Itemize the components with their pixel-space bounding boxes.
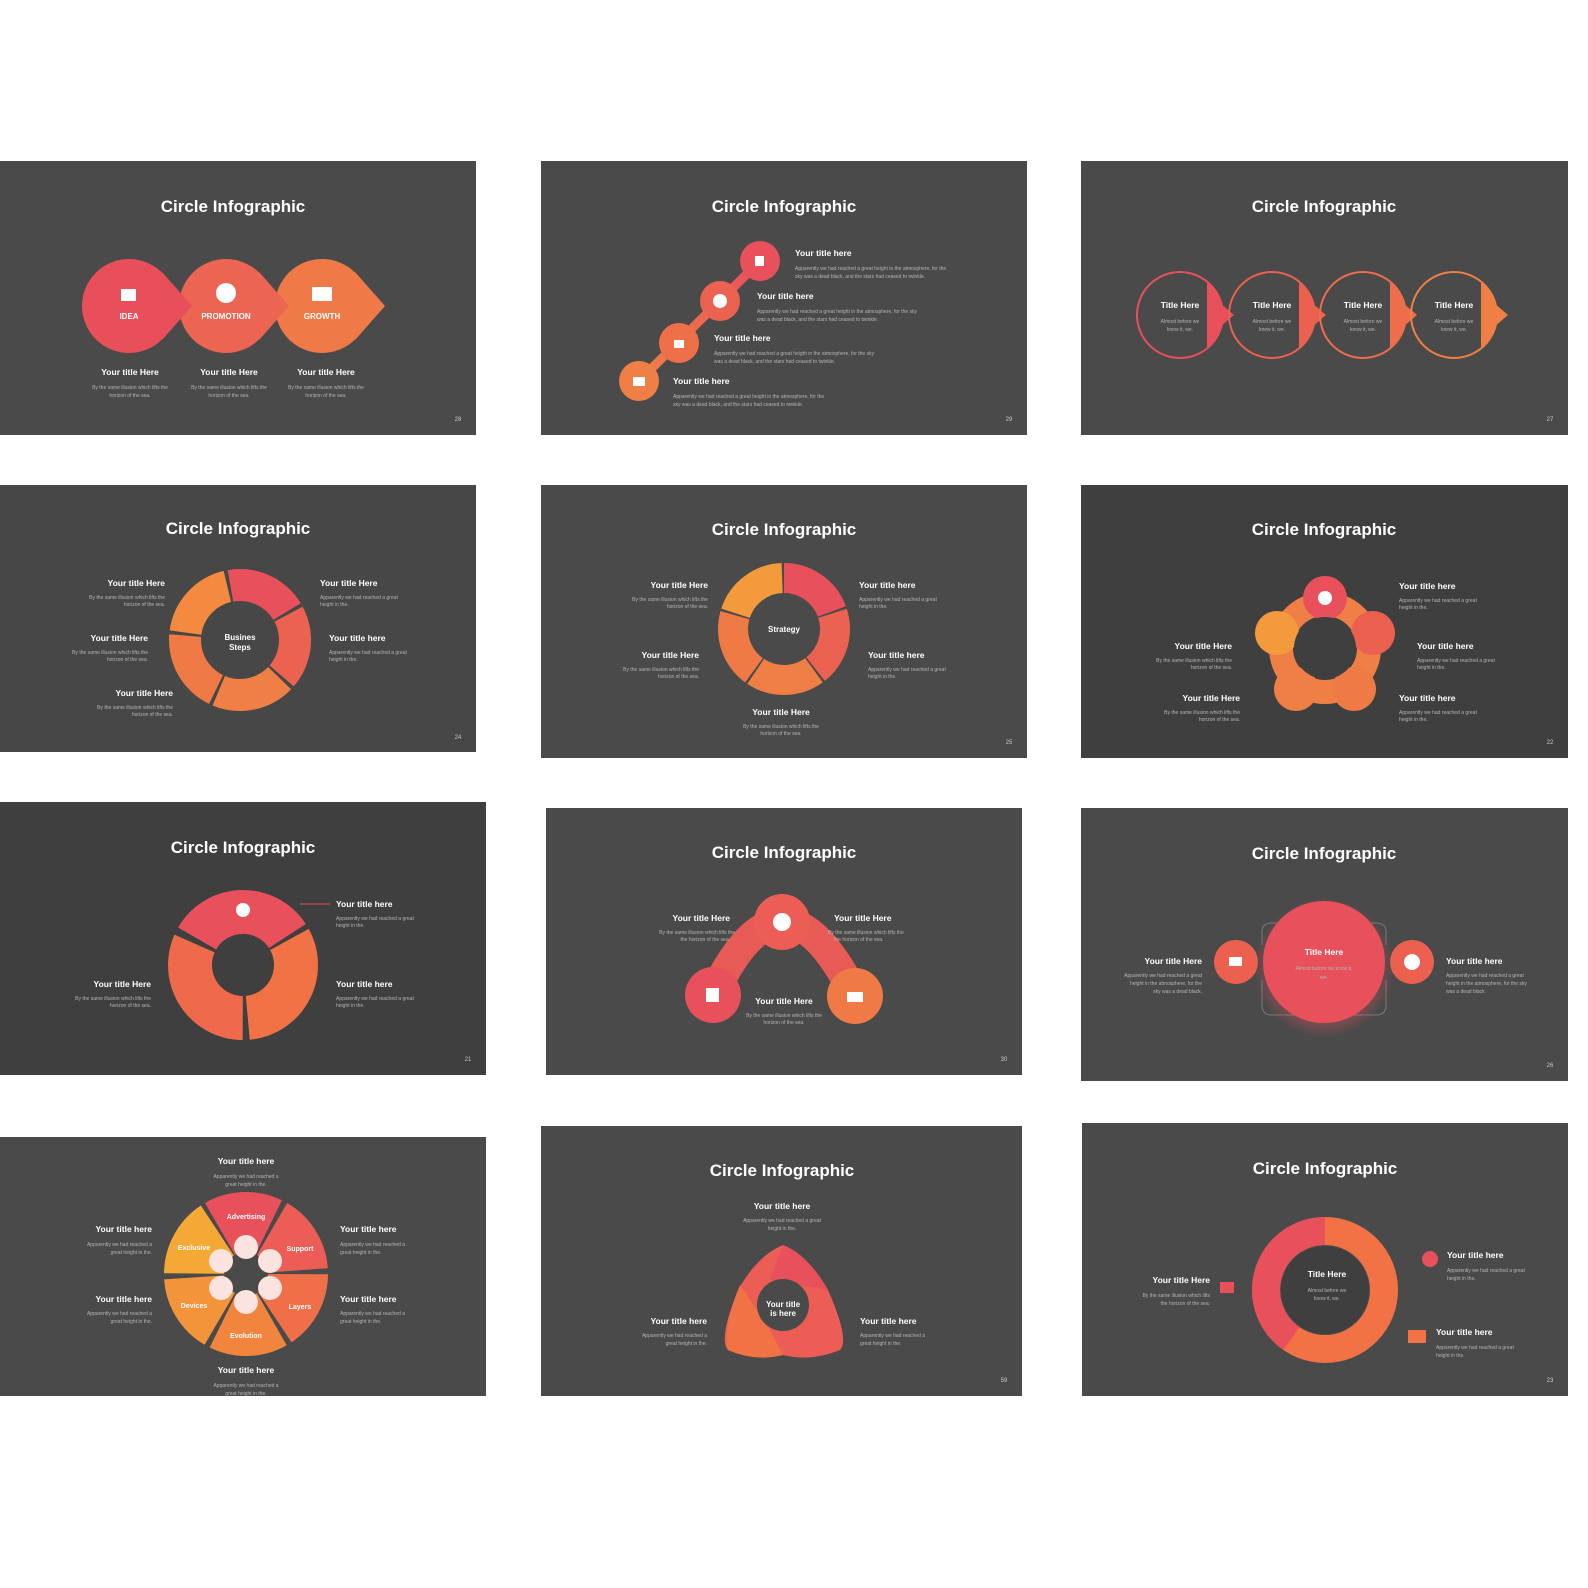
text blocks: By the same illusion which lifts the [1156,658,1232,664]
text blocks: Apparently we had reached a great [1399,710,1477,716]
ring chart [171,893,315,1037]
text blocks: Apparently we had reached a great height in the atmosphere, for the sky [714,351,875,357]
circle: promotion: PROMOTION [201,312,251,321]
text blocks: great height in the. [340,1319,381,1325]
triangle ring: Your title [766,1300,801,1309]
text blocks: By the same illusion which lifts the [72,650,148,656]
circle: growth [275,259,385,353]
title: Circle Infographic [712,843,856,862]
text blocks: Apparently we had reached a [642,1333,707,1339]
text blocks: Your title Here [1175,641,1232,651]
circle: idea [82,259,192,353]
text blocks: Your title here [795,248,852,258]
text blocks: Your title here [1417,641,1474,651]
triangle ring: is here [770,1309,796,1318]
text blocks: Your title Here [320,578,378,588]
text blocks: was a dead black. [1446,989,1486,995]
text blocks: Your title here [754,1201,811,1211]
slide 1: three circles [0,161,476,435]
text blocks: Your title here [336,899,393,909]
text blocks: Apparently we had reached a great [1436,1345,1514,1351]
text blocks: Apparently we had reached a [860,1333,925,1339]
main circle: Almost before we know it, [1296,966,1352,972]
text blocks [75,899,414,1009]
text blocks: Your title here [218,1156,275,1166]
text blocks: By the same illusion which lifts the [743,724,819,730]
title: Circle Infographic [161,197,305,216]
text blocks: Your title here [95,1294,152,1304]
text blocks: the horizon of the sea. [1161,1301,1210,1307]
center text: Almost before we [1308,1288,1347,1294]
diagonal chain [619,241,780,401]
text blocks [1142,1250,1525,1359]
text blocks: Apparently we had reached a great [1124,973,1203,979]
text blocks: sky was a dead black. [1153,989,1202,995]
text blocks: height in the. [336,1003,365,1009]
text blocks: horizon of the sea. [667,604,708,610]
text blocks: Your title Here [108,578,165,588]
circle row: Title Here [1253,300,1292,310]
arch shape [685,894,883,1024]
text blocks: height in the. [1417,665,1446,671]
text blocks: horizon of the sea. [305,393,347,399]
text blocks: By the same illusion which lifts the [92,385,168,391]
text blocks: the horizon of the sea. [681,937,730,943]
text blocks: horizon of the sea. [658,674,699,680]
slide 5: puzzle strategy ring: 25 [1006,740,1013,746]
text blocks: horizon of the sea. [208,393,250,399]
text blocks: Your title Here [752,707,810,717]
title: Circle Infographic [1252,197,1396,216]
slide 7: three-segment ring: 21 [465,1057,472,1063]
circle row: knew it, we. [1167,327,1193,333]
text blocks: the horizon of the sea. [834,937,883,943]
slide 12: two-part ring [1082,1123,1568,1396]
segment labels: Support [287,1246,314,1253]
icon: clock [236,903,250,917]
text blocks: Apparently we had reached a [213,1174,279,1180]
center label: Strategy [768,625,801,634]
text blocks: height in the. [1399,605,1428,611]
text blocks: Your title Here [1145,956,1202,966]
ring chart [1266,1231,1384,1349]
text blocks: Your title Here [94,979,151,989]
slide 1: three circles: 28 [455,417,462,423]
text blocks: Apparently we had reached a great [1446,973,1524,979]
circle row: Almost before we [1253,319,1292,325]
text blocks: height in the. [1447,1276,1476,1282]
slide 8: arch of three circles [546,808,1022,1075]
text blocks: height in the. [868,674,897,680]
text blocks: By the same illusion which lifts the [97,705,173,711]
text blocks: horizon of the sea. [760,731,802,737]
slide 9: central circle: 26 [1547,1063,1554,1069]
segment labels: Layers [289,1304,311,1311]
text blocks: sky was a dead black, and the stars had ceased to twinkle. [795,274,925,280]
text blocks: By the same illusion which lifts the [746,1013,822,1019]
text blocks: great height in the. [340,1250,381,1256]
text blocks: great height in the. [225,1182,267,1188]
text blocks: great height in the. [225,1391,267,1397]
text blocks: Your title here [1399,581,1456,591]
text blocks: Your title here [1446,956,1503,966]
text blocks: Your title here [1447,1250,1504,1260]
center text: Title Here [1308,1269,1347,1279]
text blocks: Your title here [340,1224,397,1234]
circle row: Almost before we [1344,319,1383,325]
circle row [1137,272,1508,358]
text blocks: Your title Here [1153,1275,1210,1285]
circle row: Title Here [1435,300,1474,310]
slide 11: triangular ring [541,1126,1022,1396]
text blocks: Your title here [860,1316,917,1326]
text blocks: Your title here [714,333,771,343]
title: Circle Infographic [166,519,310,538]
text blocks: height in the. [768,1226,796,1232]
text blocks: Your title here [673,376,730,386]
text blocks [1124,956,1527,995]
center label: Steps [229,643,251,652]
text blocks: height in the. [329,657,358,663]
text blocks: Your title Here [101,367,159,377]
text blocks: horizon of the sea. [763,1020,805,1026]
text blocks: By the same illusion which lifts the [623,667,699,673]
slide 3: four outlined circles [1081,161,1568,435]
text blocks: Apparently we had reached a great [743,1218,822,1224]
text blocks: height in the atmosphere, for the [1130,981,1202,987]
text blocks: Apparently we had reached a great [329,650,407,656]
slide 7: three-segment ring [0,802,486,1075]
main circle: we. [1320,975,1328,981]
icon circles [1214,940,1434,984]
slide 3: four outlined circles: 27 [1547,417,1554,423]
circle row: Title Here [1344,300,1383,310]
text blocks: Your title here [757,291,814,301]
text blocks [659,913,904,1026]
text blocks: Your title Here [673,913,730,923]
text blocks: By the same illusion which lifts the [828,930,904,936]
pie icons [209,1235,282,1314]
text blocks: height in the atmosphere, for the sky [1446,981,1527,987]
segment labels: Devices [181,1303,207,1310]
circle row: knew it, we. [1350,327,1376,333]
text blocks: horizon of the sea. [132,712,173,718]
triangle ring [725,1245,843,1358]
text blocks: By the same illusion which lifts the [288,385,364,391]
text blocks: Your title Here [116,688,173,698]
text blocks: By the same illusion which lifts the [632,597,708,603]
text blocks: Apparently we had reached a [87,1311,152,1317]
slide 2: staircase: 29 [1006,417,1013,423]
text blocks: By the same illusion which lifts the [89,595,165,601]
text blocks: Apparently we had reached a [340,1311,405,1317]
slide 6: flower: 22 [1547,740,1554,746]
text blocks: Apparently we had reached a [340,1242,405,1248]
text blocks: height in the. [1436,1353,1465,1359]
text blocks: great height in the. [860,1341,901,1347]
center text: know it, we. [1314,1296,1340,1302]
text blocks: Apparently we had reached a great [859,597,937,603]
text blocks: Your title here [218,1365,275,1375]
title: Circle Infographic [712,520,856,539]
text blocks: Apparently we had reached a great [336,916,414,922]
text blocks: Your title Here [834,913,892,923]
center label [224,633,256,652]
text blocks: horizon of the sea. [1199,717,1240,723]
text blocks: Your title Here [651,580,708,590]
text blocks [92,367,364,399]
title: Circle Infographic [1252,520,1396,539]
text blocks: By the same illusion which lifts the [1164,710,1240,716]
circle: promotion [179,259,289,353]
text blocks: Your title here [650,1316,707,1326]
circle row: Almost before we [1161,319,1200,325]
slide 11: triangular ring: 59 [1001,1378,1008,1384]
text blocks: Apparently we had reached a great [1399,598,1477,604]
slide 2: staircase [541,161,1027,435]
slide 4: business steps cycle [0,485,476,752]
connector line [300,903,330,905]
ring chart [176,576,304,704]
text blocks: Apparently we had reached a great [320,595,398,601]
text blocks: Apparently we had reached a great height in the atmosphere, for the sky [757,309,918,315]
segment labels: Exclusive [178,1245,210,1252]
text blocks: Your title here [340,1294,397,1304]
text blocks: height in the. [336,923,365,929]
text blocks: Your title here [95,1224,152,1234]
text blocks: was a dead black, and the stars had ceased to twinkle. [714,359,835,365]
text blocks: Apparently we had reached a great [336,996,414,1002]
title: Circle Infographic [1252,844,1396,863]
title: Circle Infographic [710,1161,854,1180]
slide 6: flower [1081,485,1568,758]
pie chart [190,1218,302,1330]
text blocks: Your title Here [91,633,148,643]
text blocks: horizon of the sea. [1191,665,1232,671]
segment labels [178,1214,314,1340]
puzzle ring [733,578,835,680]
connectors [1262,923,1386,1015]
text blocks: Your title Here [642,650,699,660]
center label: Busines [224,633,256,642]
icons [1220,1251,1438,1343]
circle row: knew it, we. [1441,327,1467,333]
text blocks: great height in the. [111,1319,152,1325]
segment labels: Evolution [230,1333,262,1340]
text blocks: Apparently we had reached a great height in the atmosphere, for the [795,266,946,272]
center text [1281,1246,1369,1334]
slide 9: central circle [1081,808,1568,1081]
main circle [1254,898,1394,1038]
text blocks: height in the. [320,602,349,608]
text blocks: great height in the. [111,1250,152,1256]
text blocks: Apparently we had reached a great [1417,658,1495,664]
title: Circle Infographic [712,197,856,216]
circle: idea: IDEA [119,312,139,321]
slide 8: arch of three circles: 30 [1001,1057,1008,1063]
text blocks: sky was a dead black, and the stars had ceased to twinkle. [673,402,803,408]
text blocks: Your title here [336,979,393,989]
text blocks: Apparently we had reached a [213,1383,279,1389]
text blocks: Your title here [329,633,386,643]
text blocks: Your title here [1436,1327,1493,1337]
title: Circle Infographic [171,838,315,857]
text blocks: Your title Here [200,367,258,377]
text blocks: was a dead black, and the stars had ceased to twinkle. [757,317,878,323]
circle: growth: GROWTH [304,312,340,321]
text blocks: Your title here [859,580,916,590]
text blocks: Apparently we had reached a great [1447,1268,1525,1274]
text blocks: Apparently we had reached a great [868,667,946,673]
circle row: Title Here [1161,300,1200,310]
text blocks: Apparently we had reached a great height in the atmosphere, for the [673,394,824,400]
text blocks [72,578,407,718]
slide 12: two-part ring: 23 [1547,1378,1554,1384]
circle row: Almost before we [1435,319,1474,325]
text blocks: horizon of the sea. [109,393,151,399]
text blocks: Apparently we had reached a [87,1242,152,1248]
text blocks: horizon of the sea. [110,1003,151,1009]
text blocks: height in the. [1399,717,1428,723]
text blocks: By the same illusion which lifts the [191,385,267,391]
text blocks: great height in the. [666,1341,707,1347]
flower chart [1255,576,1395,711]
text blocks [87,1156,405,1397]
text blocks: Your title here [1399,693,1456,703]
text blocks: Your title here [868,650,925,660]
text blocks: By the same illusion which lifts the [659,930,735,936]
text blocks: horizon of the sea. [107,657,148,663]
title: Circle Infographic [1253,1159,1397,1178]
slide 5: puzzle strategy ring [541,485,1027,758]
text blocks [642,1201,925,1347]
text blocks: Your title Here [1183,693,1240,703]
text blocks [623,580,946,737]
text blocks: By the same illusion which lifts the [75,996,151,1002]
text blocks: Your title Here [755,996,813,1006]
segment labels: Advertising [227,1214,265,1221]
circle row: knew it, we. [1259,327,1285,333]
text blocks [673,248,946,408]
slide 10: six-segment pie [0,1137,486,1397]
text blocks: Your title Here [297,367,355,377]
main circle: Title Here [1305,947,1344,957]
text blocks: horizon of the sea. [124,602,165,608]
slide 4: business steps cycle: 24 [455,735,462,741]
text blocks [1156,581,1495,723]
text blocks: By the same illusion which lifts [1142,1293,1210,1299]
text blocks: height in the. [859,604,888,610]
